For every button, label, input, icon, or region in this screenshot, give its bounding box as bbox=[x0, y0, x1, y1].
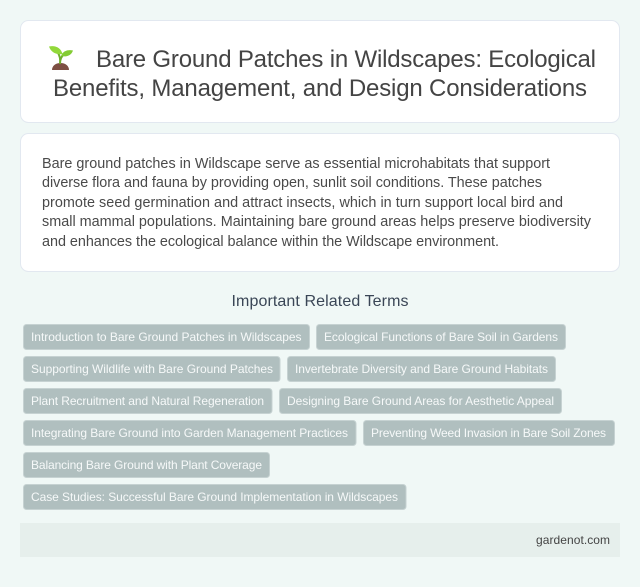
footer bbox=[20, 523, 620, 557]
title: Bare Ground Patches in Wildscapes: Ecological bbox=[96, 46, 596, 73]
footer source text: gardenot.com bbox=[536, 533, 610, 547]
chip: ecological functions: Ecological Functions of Bare Soil in Gardens bbox=[324, 330, 558, 344]
title: Benefits, Management, and Design Considerations bbox=[53, 75, 587, 102]
panel: description bbox=[20, 134, 620, 272]
chip: designing areas bbox=[280, 388, 562, 414]
chip: case studies: Case Studies: Successful Bare Ground Implementation in Wildscapes bbox=[31, 490, 398, 504]
chip: ecological functions bbox=[316, 324, 566, 350]
chip: balancing bare ground bbox=[24, 452, 270, 478]
heading: related terms: Important Related Terms bbox=[232, 293, 408, 310]
chip: integrating bare ground bbox=[24, 420, 356, 446]
chip: supporting wildlife: Supporting Wildlife with Bare Ground Patches bbox=[31, 362, 273, 376]
chip: plant recruitment: Plant Recruitment and Natural Regeneration bbox=[31, 394, 264, 408]
text block: description: Bare ground patches in Wildscape serve as essential microhabitats that support bbox=[42, 156, 550, 172]
chip: designing areas: Designing Bare Ground Areas for Aesthetic Appeal bbox=[287, 394, 554, 408]
chip: case studies bbox=[24, 484, 406, 510]
chip: preventing weed invasion bbox=[364, 420, 614, 446]
chip: introduction bbox=[24, 324, 310, 350]
text block: description: promote seed germination and attract insects, which in turn support local bird and bbox=[42, 195, 563, 211]
icon: sprout bbox=[49, 46, 73, 70]
chip: preventing weed invasion: Preventing Weed Invasion in Bare Soil Zones bbox=[371, 426, 606, 440]
panel: term chips bbox=[24, 324, 614, 510]
text block: description bbox=[42, 156, 592, 250]
chip: plant recruitment bbox=[24, 388, 272, 414]
chip: invertebrate diversity: Invertebrate Diversity and Bare Ground Habitats bbox=[295, 362, 548, 376]
chip: introduction: Introduction to Bare Ground Patches in Wildscapes bbox=[31, 330, 302, 344]
text block: description: diverse flora and fauna by providing open, sunlit soil conditions. These patches bbox=[42, 175, 542, 191]
panel: title card bbox=[20, 20, 620, 122]
title bbox=[53, 46, 596, 102]
chip: supporting wildlife bbox=[24, 356, 280, 382]
chip: integrating bare ground: Integrating Bare Ground into Garden Management Practices bbox=[31, 426, 348, 440]
text block: description: small mammal populations. Maintaining bare ground areas helps preserve biodiversity bbox=[42, 214, 592, 230]
text block: description: and enhances the ecological balance within the Wildscape environment. bbox=[42, 234, 499, 250]
chip: invertebrate diversity bbox=[288, 356, 556, 382]
chip: balancing bare ground: Balancing Bare Ground with Plant Coverage bbox=[31, 458, 262, 472]
